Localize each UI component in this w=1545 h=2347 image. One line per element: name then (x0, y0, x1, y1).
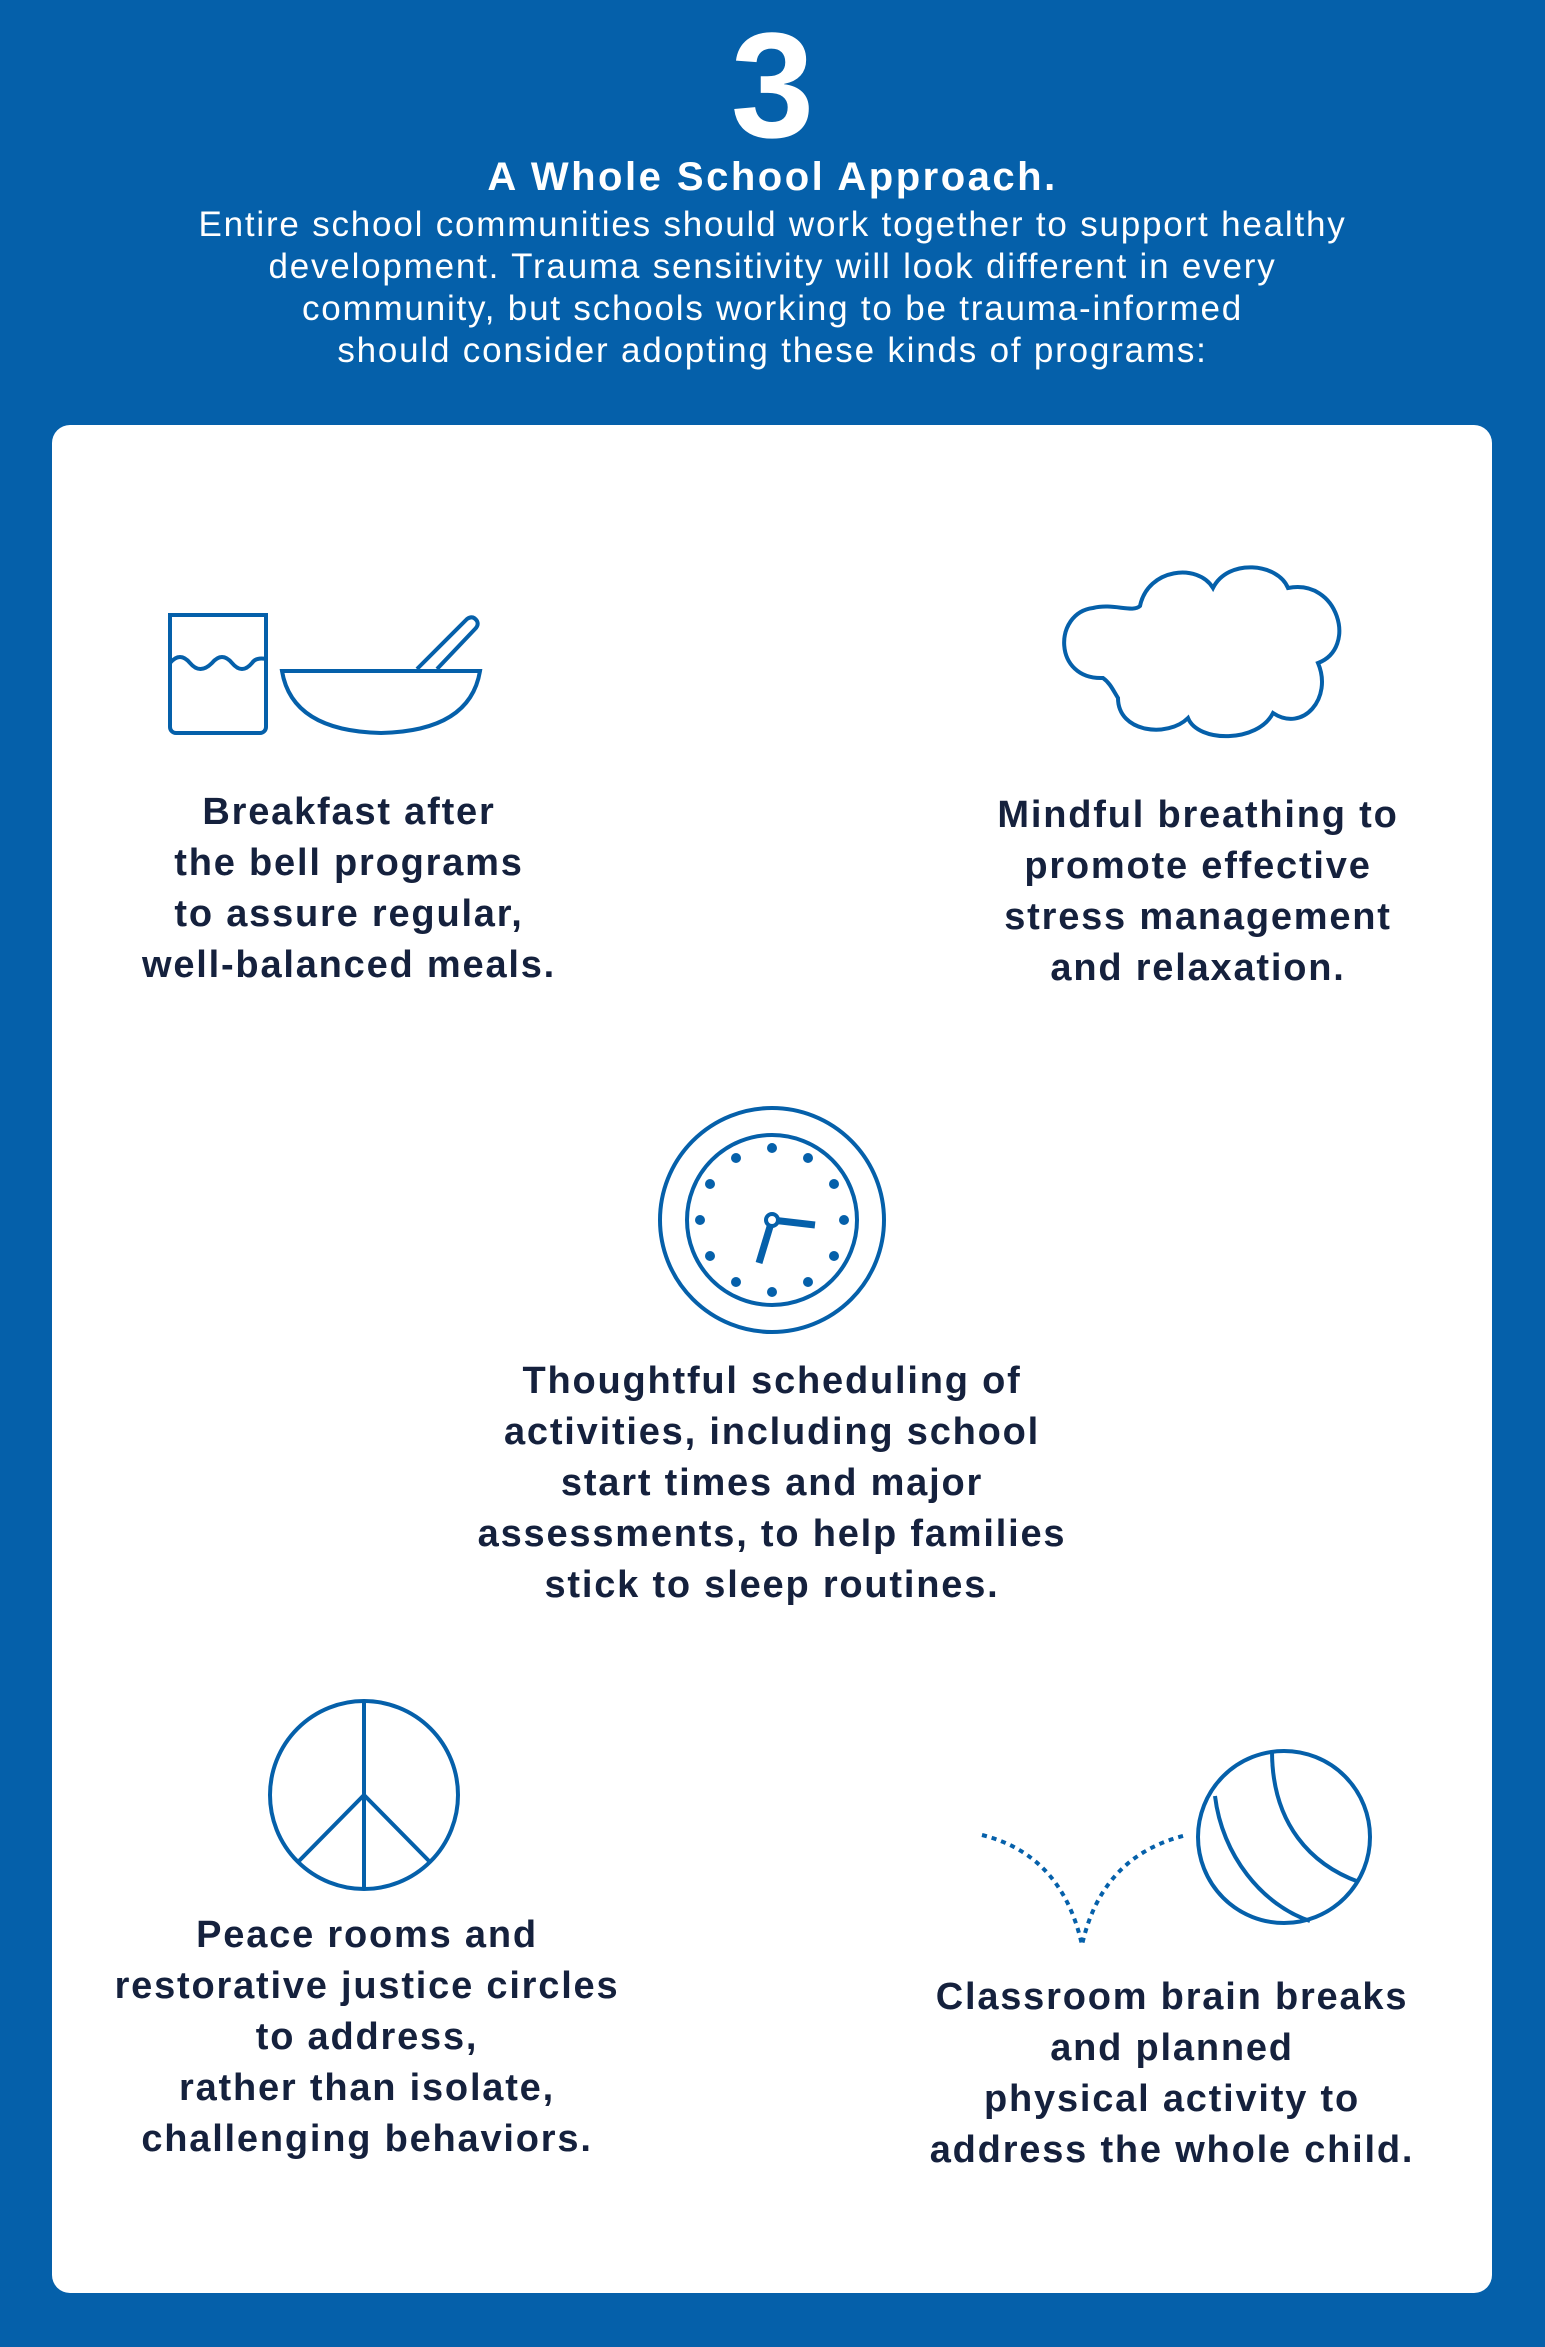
panel: programs (52, 425, 1492, 2293)
text: brain breaks: Classroom brain breaks (936, 1976, 1408, 2018)
text: scheduling: assessments, to help families (478, 1513, 1066, 1555)
text: mindful breathing: stress management (1004, 896, 1392, 938)
intro text: should consider adopting these kinds of programs: (337, 331, 1208, 370)
icon: clock (658, 1106, 886, 1334)
text: scheduling: start times and major (561, 1462, 983, 1504)
text: mindful breathing: Mindful breathing to (997, 794, 1399, 836)
intro text: community, but schools working to be trauma-informed (302, 289, 1243, 328)
intro text: development. Trauma sensitivity will look different in every (268, 247, 1277, 286)
icon: peace sign (268, 1699, 460, 1891)
title: A Whole School Approach. (487, 155, 1058, 199)
text: brain breaks: address the whole child. (930, 2129, 1414, 2171)
text: breakfast: the bell programs (174, 842, 524, 884)
icon: glass and bowl (168, 613, 482, 735)
text: scheduling: activities, including school (504, 1411, 1040, 1453)
text: peace rooms: Peace rooms and (196, 1914, 538, 1956)
text: peace rooms: restorative justice circles (115, 1965, 619, 2007)
number 3: 3 (731, 1, 814, 169)
text: peace rooms: challenging behaviors. (141, 2118, 593, 2160)
text: mindful breathing (997, 794, 1399, 989)
text: breakfast (142, 791, 556, 986)
intro text (198, 205, 1347, 370)
icon: cloud (1062, 565, 1342, 738)
text: brain breaks: physical activity to (984, 2078, 1360, 2120)
text: peace rooms: to address, (256, 2016, 478, 2058)
text: breakfast: Breakfast after (202, 791, 496, 833)
text: scheduling: stick to sleep routines. (544, 1564, 999, 1606)
text: peace rooms (115, 1914, 619, 2160)
text: mindful breathing: and relaxation. (1050, 947, 1346, 989)
text: brain breaks: and planned (1050, 2027, 1294, 2069)
text: scheduling (478, 1360, 1066, 1606)
text: breakfast: to assure regular, (174, 893, 524, 935)
text: mindful breathing: promote effective (1024, 845, 1372, 887)
text: brain breaks (930, 1976, 1414, 2171)
icon: bouncing ball (982, 1749, 1372, 1943)
text: scheduling: Thoughtful scheduling of (522, 1360, 1022, 1402)
intro text: Entire school communities should work together to support healthy (198, 205, 1347, 244)
text: breakfast: well-balanced meals. (142, 944, 556, 986)
text: peace rooms: rather than isolate, (179, 2067, 555, 2109)
